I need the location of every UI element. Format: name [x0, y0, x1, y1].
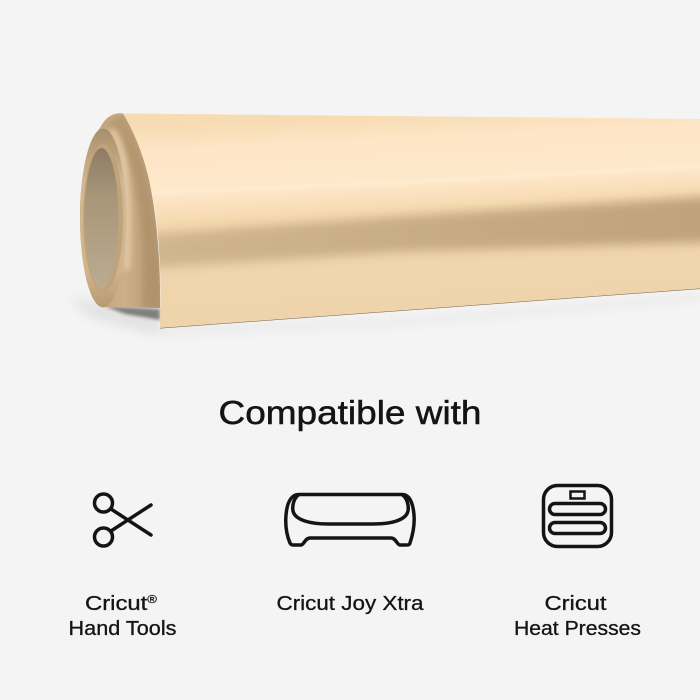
roll end disc	[80, 128, 126, 308]
label: Cricut Hand Tools	[68, 593, 176, 640]
label: Cricut Heat Presses	[514, 593, 641, 640]
icon: scissors	[94, 494, 151, 546]
label: Cricut Hand Tools: Hand Tools	[68, 618, 176, 640]
column: heat presses	[514, 486, 641, 640]
column: hand tools	[68, 494, 176, 640]
label: Cricut Joy Xtra: Cricut Joy Xtra	[276, 593, 424, 615]
unrolled vinyl sheet	[110, 110, 700, 335]
heading: Compatible with	[218, 394, 482, 431]
roll shadow	[70, 295, 700, 334]
label: Cricut Heat Presses: Heat Presses	[514, 618, 641, 640]
label: Cricut Hand Tools: ®	[147, 594, 157, 606]
label: Cricut Heat Presses: Cricut	[544, 593, 607, 615]
column: Cricut Joy Xtra	[276, 494, 424, 615]
label: Cricut Hand Tools: Cricut	[85, 593, 137, 615]
icon: Cricut Joy Xtra machine	[286, 494, 414, 545]
icon: heat press	[544, 486, 612, 546]
product photo: gold vinyl roll	[70, 110, 700, 335]
rear curl of the roll	[80, 113, 160, 308]
roll core opening	[84, 148, 118, 288]
infographic canvas	[70, 113, 700, 636]
